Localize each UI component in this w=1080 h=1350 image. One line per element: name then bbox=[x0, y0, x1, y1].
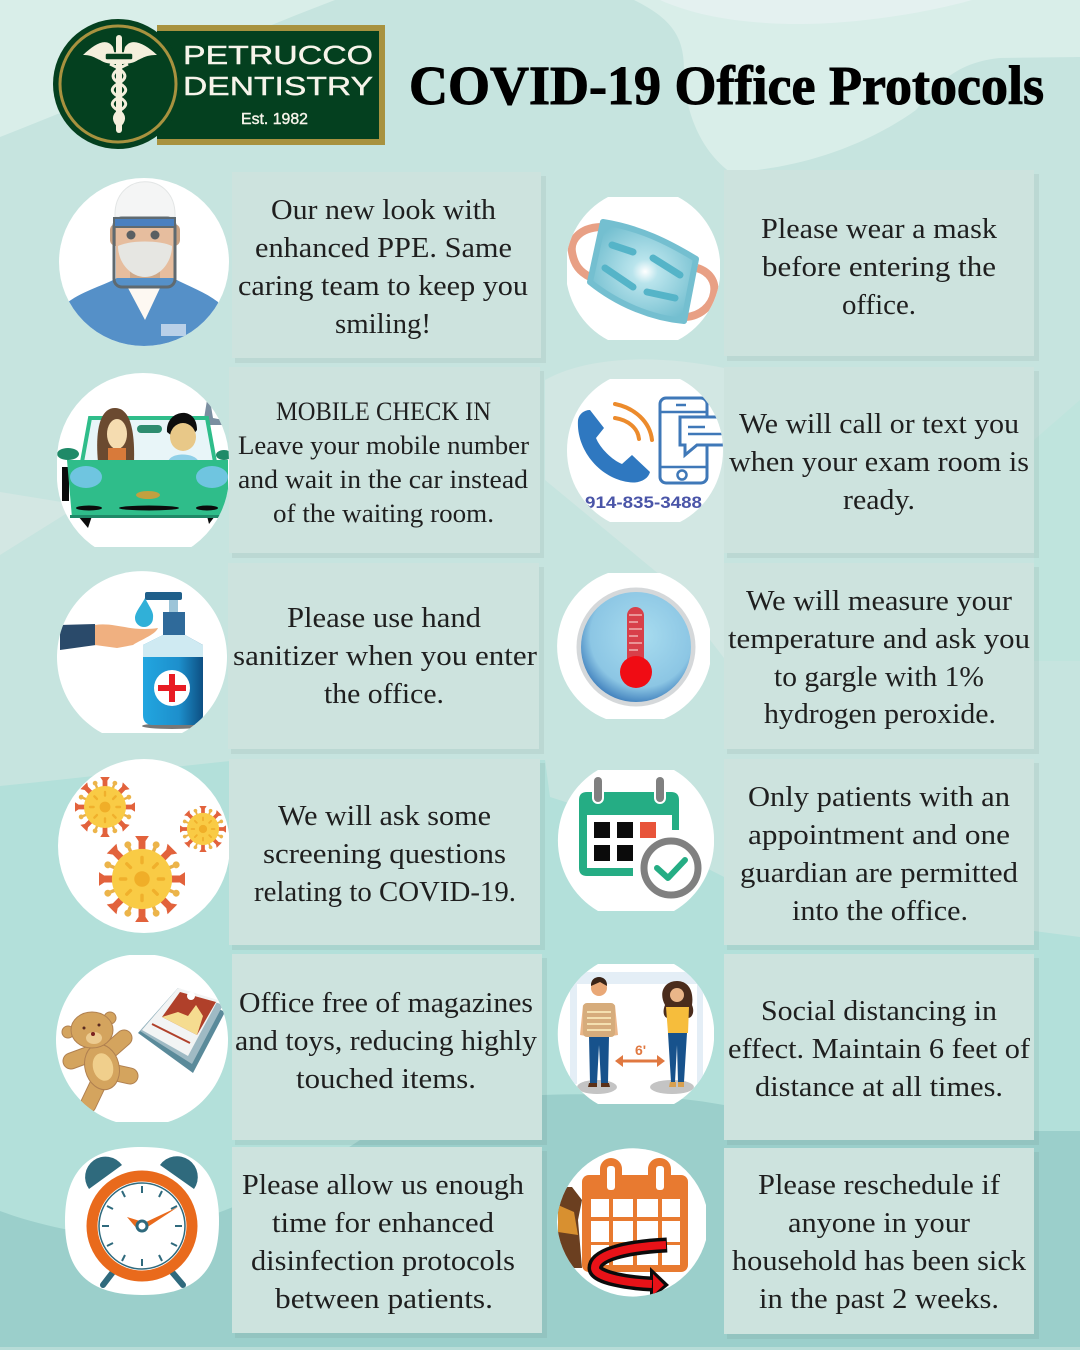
icon: teddy bear and magazines bbox=[56, 955, 229, 1122]
panel: hand sanitizer bbox=[57, 563, 544, 754]
text block: Please use hand bbox=[287, 602, 482, 634]
text block: before entering the bbox=[762, 251, 996, 283]
text block: caring team to keep you bbox=[238, 270, 528, 302]
text block: effect. Maintain 6 feet of bbox=[728, 1033, 1030, 1065]
icon: hand and sanitizer bottle bbox=[57, 571, 228, 734]
logo text: PETRUCCO bbox=[183, 40, 373, 70]
text block: smiling! bbox=[335, 308, 431, 340]
icon: thermometer badge bbox=[557, 573, 710, 719]
text block bbox=[232, 1147, 547, 1338]
text block: household has been sick bbox=[732, 1245, 1027, 1277]
panel: temperature bbox=[557, 563, 1039, 754]
text block bbox=[724, 954, 1039, 1145]
icon: dentist with face shield bbox=[55, 178, 235, 350]
text block: Only patients with an bbox=[748, 781, 1011, 813]
text block: disinfection protocols bbox=[251, 1245, 515, 1277]
icon: alarm clock bbox=[65, 1147, 219, 1295]
distance arrow: 6' bbox=[635, 1042, 646, 1058]
text block: into the office. bbox=[792, 895, 968, 927]
distance arrow bbox=[615, 1046, 665, 1067]
text block bbox=[724, 1148, 1039, 1339]
text block: Social distancing in bbox=[761, 995, 998, 1027]
text block: appointment and one bbox=[748, 819, 1010, 851]
logo text bbox=[183, 40, 373, 128]
text block: screening questions bbox=[263, 838, 506, 870]
logo text: Est. 1982 bbox=[241, 111, 308, 128]
text block: Please wear a mask bbox=[761, 213, 998, 245]
text block: of the waiting room. bbox=[273, 499, 494, 528]
text block bbox=[232, 172, 546, 363]
text block: Office free of magazines bbox=[239, 987, 533, 1019]
text block bbox=[228, 563, 544, 754]
text block: Leave your mobile number bbox=[238, 431, 529, 460]
text block: office. bbox=[842, 289, 916, 321]
panel: disinfection time bbox=[65, 1147, 547, 1338]
text block: anyone in your bbox=[788, 1207, 970, 1239]
text block bbox=[724, 367, 1039, 558]
icon: virus particles bbox=[58, 759, 230, 933]
panel: call or text bbox=[567, 367, 1039, 558]
text block: We will measure your bbox=[746, 585, 1012, 617]
panel: mobile check in bbox=[57, 367, 544, 558]
text block: and toys, reducing highly bbox=[235, 1025, 538, 1057]
icon: two people six feet apart bbox=[557, 964, 714, 1104]
text block: when your exam room is bbox=[729, 446, 1029, 478]
text block: touched items. bbox=[296, 1063, 476, 1095]
text block: hydrogen peroxide. bbox=[764, 698, 996, 730]
text block bbox=[724, 759, 1039, 950]
text block: Please reschedule if bbox=[758, 1169, 1000, 1201]
text block: enhanced PPE. Same bbox=[255, 232, 512, 264]
text block: MOBILE CHECK IN bbox=[276, 397, 491, 426]
text block: in the past 2 weeks. bbox=[759, 1283, 999, 1315]
text block: ready. bbox=[843, 484, 915, 516]
text block bbox=[229, 759, 545, 950]
text block bbox=[232, 954, 547, 1145]
text block: distance at all times. bbox=[755, 1071, 1003, 1103]
text block: and wait in the car instead bbox=[238, 465, 528, 494]
logo text: DENTISTRY bbox=[183, 71, 373, 101]
icon: phone and message with number bbox=[567, 379, 724, 522]
logo bbox=[53, 19, 385, 149]
title: COVID-19 Office Protocols bbox=[409, 55, 1044, 116]
icon: people waiting in car bbox=[57, 373, 232, 547]
text block bbox=[724, 563, 1039, 754]
text block bbox=[229, 367, 544, 558]
phone number: 914-835-3488 bbox=[585, 493, 702, 512]
text block: time for enhanced bbox=[272, 1207, 495, 1239]
panel: enhanced PPE bbox=[55, 172, 546, 363]
text block: temperature and ask you bbox=[728, 623, 1030, 655]
text block bbox=[724, 170, 1039, 361]
text block: Please allow us enough bbox=[242, 1169, 525, 1201]
icon: calendar with reschedule arrow bbox=[557, 1144, 707, 1300]
logo circle bbox=[53, 19, 183, 149]
text block: Our new look with bbox=[271, 194, 497, 226]
text block: We will ask some bbox=[278, 800, 491, 832]
text block: to gargle with 1% bbox=[774, 661, 984, 693]
text block: sanitizer when you enter bbox=[233, 640, 537, 672]
icon: calendar with check bbox=[557, 770, 714, 911]
logo banner bbox=[157, 25, 385, 145]
text block: relating to COVID-19. bbox=[254, 876, 516, 908]
icon: caduceus bbox=[83, 35, 157, 133]
panel: magazines and toys bbox=[56, 954, 547, 1145]
panel: reschedule bbox=[557, 1144, 1039, 1339]
panel: wear a mask bbox=[567, 170, 1039, 361]
panel: appointment only bbox=[557, 759, 1039, 950]
icon: surgical mask bbox=[567, 197, 720, 340]
text block: the office. bbox=[324, 678, 444, 710]
text block: guardian are permitted bbox=[740, 857, 1019, 889]
panel: screening questions bbox=[58, 759, 545, 950]
panel: social distancing bbox=[557, 954, 1039, 1145]
text block: between patients. bbox=[275, 1283, 493, 1315]
text block: We will call or text you bbox=[739, 408, 1019, 440]
